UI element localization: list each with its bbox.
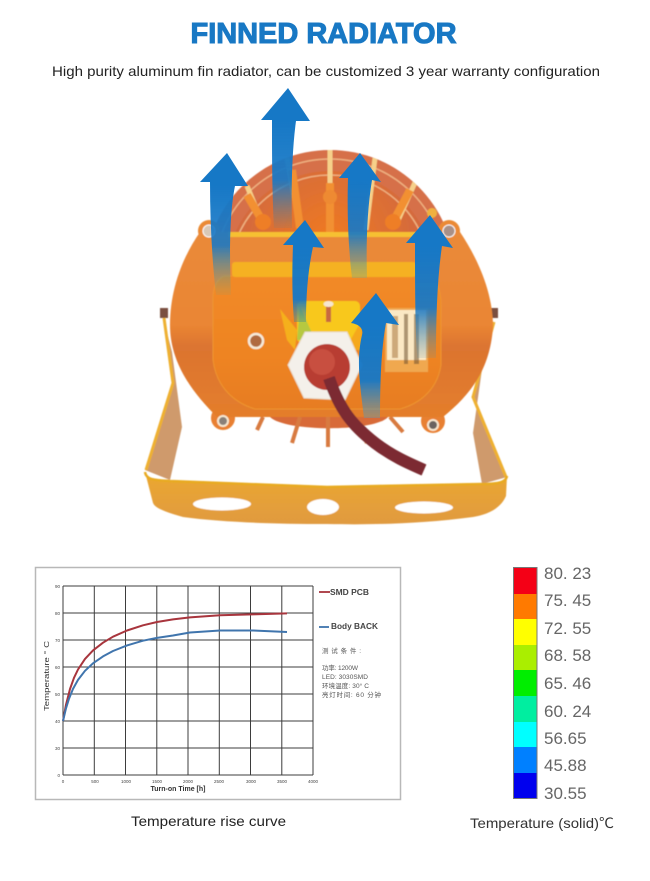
curve: Body BACK [63, 630, 287, 721]
curve: SMD PCB [63, 613, 287, 721]
y axis ticks: 0 [57, 773, 60, 778]
y axis title: Temperature ° C [42, 640, 51, 711]
y axis ticks: 50 [55, 692, 60, 697]
test conditions: LED: 3030SMD [322, 674, 368, 681]
arrow: top centre [261, 88, 310, 228]
cable gland [288, 332, 362, 400]
grid [63, 586, 313, 775]
scale values: 65. 46 [544, 674, 591, 693]
arrow: right [406, 215, 453, 358]
y axis ticks: 40 [55, 719, 60, 724]
bottom fins [257, 417, 403, 447]
x axis ticks: 3500 [277, 779, 288, 784]
housing body [170, 220, 493, 433]
scale values [544, 564, 591, 803]
scale values: 30.55 [544, 784, 587, 803]
test conditions: 亮灯时间: 60 分钟 [322, 690, 382, 699]
scale caption: Temperature (solid)℃ [470, 815, 614, 831]
legend: SMD PCB: SMD PCB [330, 588, 369, 597]
arrow: centre [283, 220, 324, 322]
scale values: 75. 45 [544, 591, 591, 610]
x axis ticks: 4000 [308, 779, 319, 784]
y axis ticks: 70 [55, 638, 60, 643]
x axis ticks: 0 [62, 779, 65, 784]
legend: Body BACK: Body BACK [331, 622, 378, 631]
scale values: 68. 58 [544, 646, 591, 665]
power cable [329, 378, 424, 470]
scale values: 80. 23 [544, 564, 591, 583]
x axis title: Turn-on Time [h] [150, 786, 206, 793]
slot holes [193, 498, 453, 515]
y axis ticks [55, 584, 60, 778]
test conditions [322, 646, 382, 699]
x axis ticks: 2500 [214, 779, 225, 784]
y axis ticks: 60 [55, 665, 60, 670]
colour bar [513, 567, 537, 798]
x axis ticks: 1500 [152, 779, 163, 784]
y axis ticks: 90 [55, 584, 60, 589]
x axis ticks: 1000 [121, 779, 132, 784]
y axis ticks: 80 [55, 611, 60, 616]
x axis ticks: 3000 [246, 779, 257, 784]
scale values: 60. 24 [544, 702, 591, 721]
x axis ticks [62, 779, 319, 784]
x axis ticks: 500 [91, 779, 99, 784]
title: FINNED RADIATOR [190, 18, 457, 50]
temperature rise chart [36, 568, 400, 800]
mounting bracket [145, 308, 507, 524]
arrow: left [200, 153, 248, 295]
rear fins dome [217, 149, 444, 233]
test conditions: 功率: 1200W [322, 663, 359, 672]
subtitle: High purity aluminum fin radiator, can be customized 3 year warranty configuration [52, 63, 600, 79]
scale values: 45.88 [544, 756, 587, 775]
arrow: centre right [339, 153, 381, 278]
chart caption: Temperature rise curve [131, 813, 286, 829]
junction box [280, 301, 362, 350]
x axis ticks: 2000 [183, 779, 194, 784]
lamp illustration [145, 150, 507, 524]
temperature colour scale [513, 564, 591, 803]
arrow: lower [351, 293, 399, 418]
product label [385, 308, 428, 372]
test conditions: 测试条件: [322, 646, 361, 655]
scale values: 72. 55 [544, 619, 591, 638]
airflow arrows [200, 88, 453, 418]
chart frame [36, 568, 400, 800]
scale values: 56.65 [544, 729, 587, 748]
y axis ticks: 30 [55, 746, 60, 751]
test conditions: 环境温度: 30° C [322, 681, 369, 690]
screws [203, 225, 455, 430]
